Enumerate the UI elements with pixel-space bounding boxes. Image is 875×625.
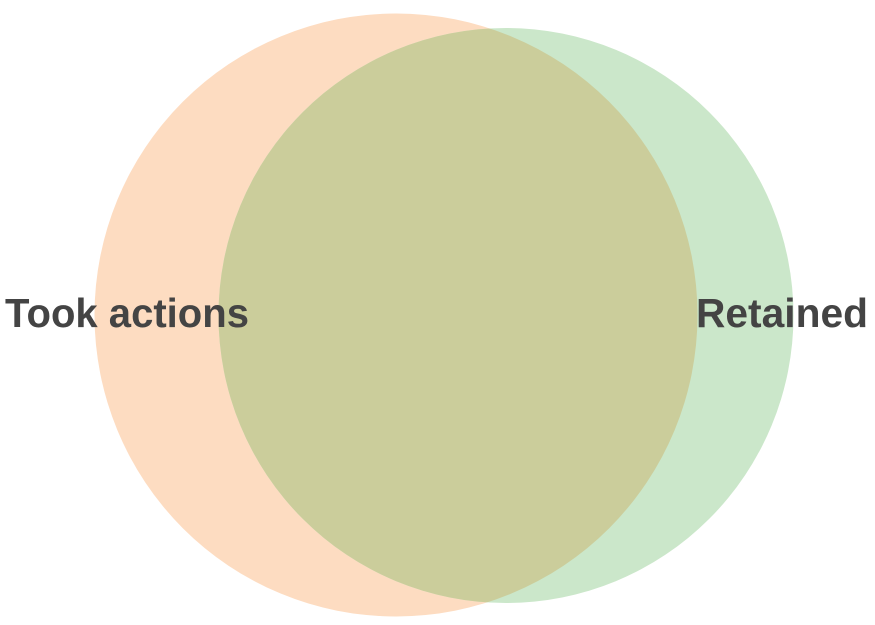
circle: took actions bbox=[94, 14, 698, 616]
circle: retained bbox=[218, 28, 794, 603]
label: took actions: Took actions bbox=[5, 290, 249, 336]
label: retained: Retained bbox=[696, 290, 868, 336]
overlap region bbox=[218, 28, 698, 602]
